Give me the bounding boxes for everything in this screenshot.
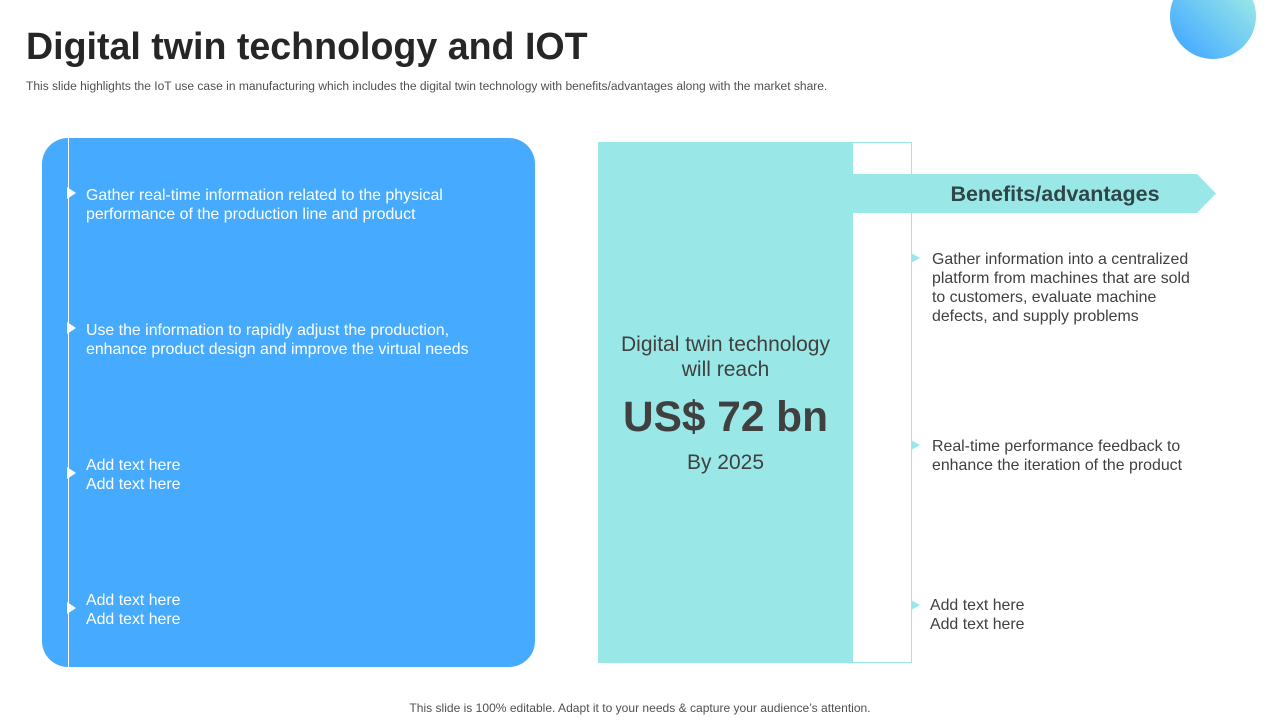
use case text 4: Add text here bbox=[86, 611, 181, 628]
market size figure: US$ 72 bn bbox=[623, 393, 828, 440]
benefit text 3: Add text here bbox=[930, 616, 1025, 633]
bullet marker 4 bbox=[67, 602, 76, 614]
benefit text 2: Real-time performance feedback to bbox=[932, 438, 1180, 455]
bullet marker 2 bbox=[67, 322, 76, 334]
footer note: This slide is 100% editable. Adapt it to your needs & capture your audience’s attention. bbox=[409, 701, 871, 715]
title: Digital twin technology and IOT bbox=[26, 25, 588, 67]
panel: market size bbox=[598, 142, 853, 662]
use case text 3: Add text here bbox=[86, 476, 181, 493]
bullet marker 3 bbox=[67, 467, 76, 479]
use case text 1: Gather real-time information related to the physical bbox=[86, 187, 443, 204]
benefit text 1: Gather information into a centralized bbox=[932, 251, 1188, 268]
bullet marker 1 bbox=[67, 187, 76, 199]
market size lead text: will reach bbox=[682, 358, 769, 381]
use case text 3: Add text here bbox=[86, 457, 181, 474]
market size lead text bbox=[621, 333, 830, 381]
benefit text 3 bbox=[930, 597, 1025, 633]
outlined benefits frame bbox=[598, 142, 912, 663]
use case text 1: performance of the production line and product bbox=[86, 206, 416, 223]
benefit marker 3 bbox=[911, 600, 920, 610]
benefits arrow banner bbox=[853, 174, 1216, 213]
use case text 1 bbox=[86, 187, 443, 223]
use case text 2: Use the information to rapidly adjust the production, bbox=[86, 322, 449, 339]
vertical timeline line bbox=[68, 138, 69, 667]
benefit text 2: enhance the iteration of the product bbox=[932, 457, 1182, 474]
market size year: By 2025 bbox=[687, 451, 764, 474]
benefit text 1: defects, and supply problems bbox=[932, 308, 1139, 325]
panel: IoT use cases bbox=[42, 138, 535, 667]
benefit marker 1 bbox=[911, 253, 920, 263]
decorative gradient circle bbox=[1170, 0, 1256, 59]
use case text 2: enhance product design and improve the virtual needs bbox=[86, 341, 469, 358]
use case text 2 bbox=[86, 322, 469, 358]
use case text 4: Add text here bbox=[86, 592, 181, 609]
benefit marker 2 bbox=[911, 440, 920, 450]
use case text 4 bbox=[86, 592, 181, 628]
benefits heading: Benefits/advantages bbox=[950, 182, 1160, 206]
use case text 3 bbox=[86, 457, 181, 493]
benefit text 1: to customers, evaluate machine bbox=[932, 289, 1156, 306]
benefit text 3: Add text here bbox=[930, 597, 1025, 614]
market size lead text: Digital twin technology bbox=[621, 333, 830, 356]
benefit text 1 bbox=[932, 251, 1190, 325]
benefit text 2 bbox=[932, 438, 1182, 474]
subtitle: This slide highlights the IoT use case in manufacturing which includes the digital twin technology with benefits/advantages along with the market share. bbox=[26, 79, 827, 93]
benefit text 1: platform from machines that are sold bbox=[932, 270, 1190, 287]
